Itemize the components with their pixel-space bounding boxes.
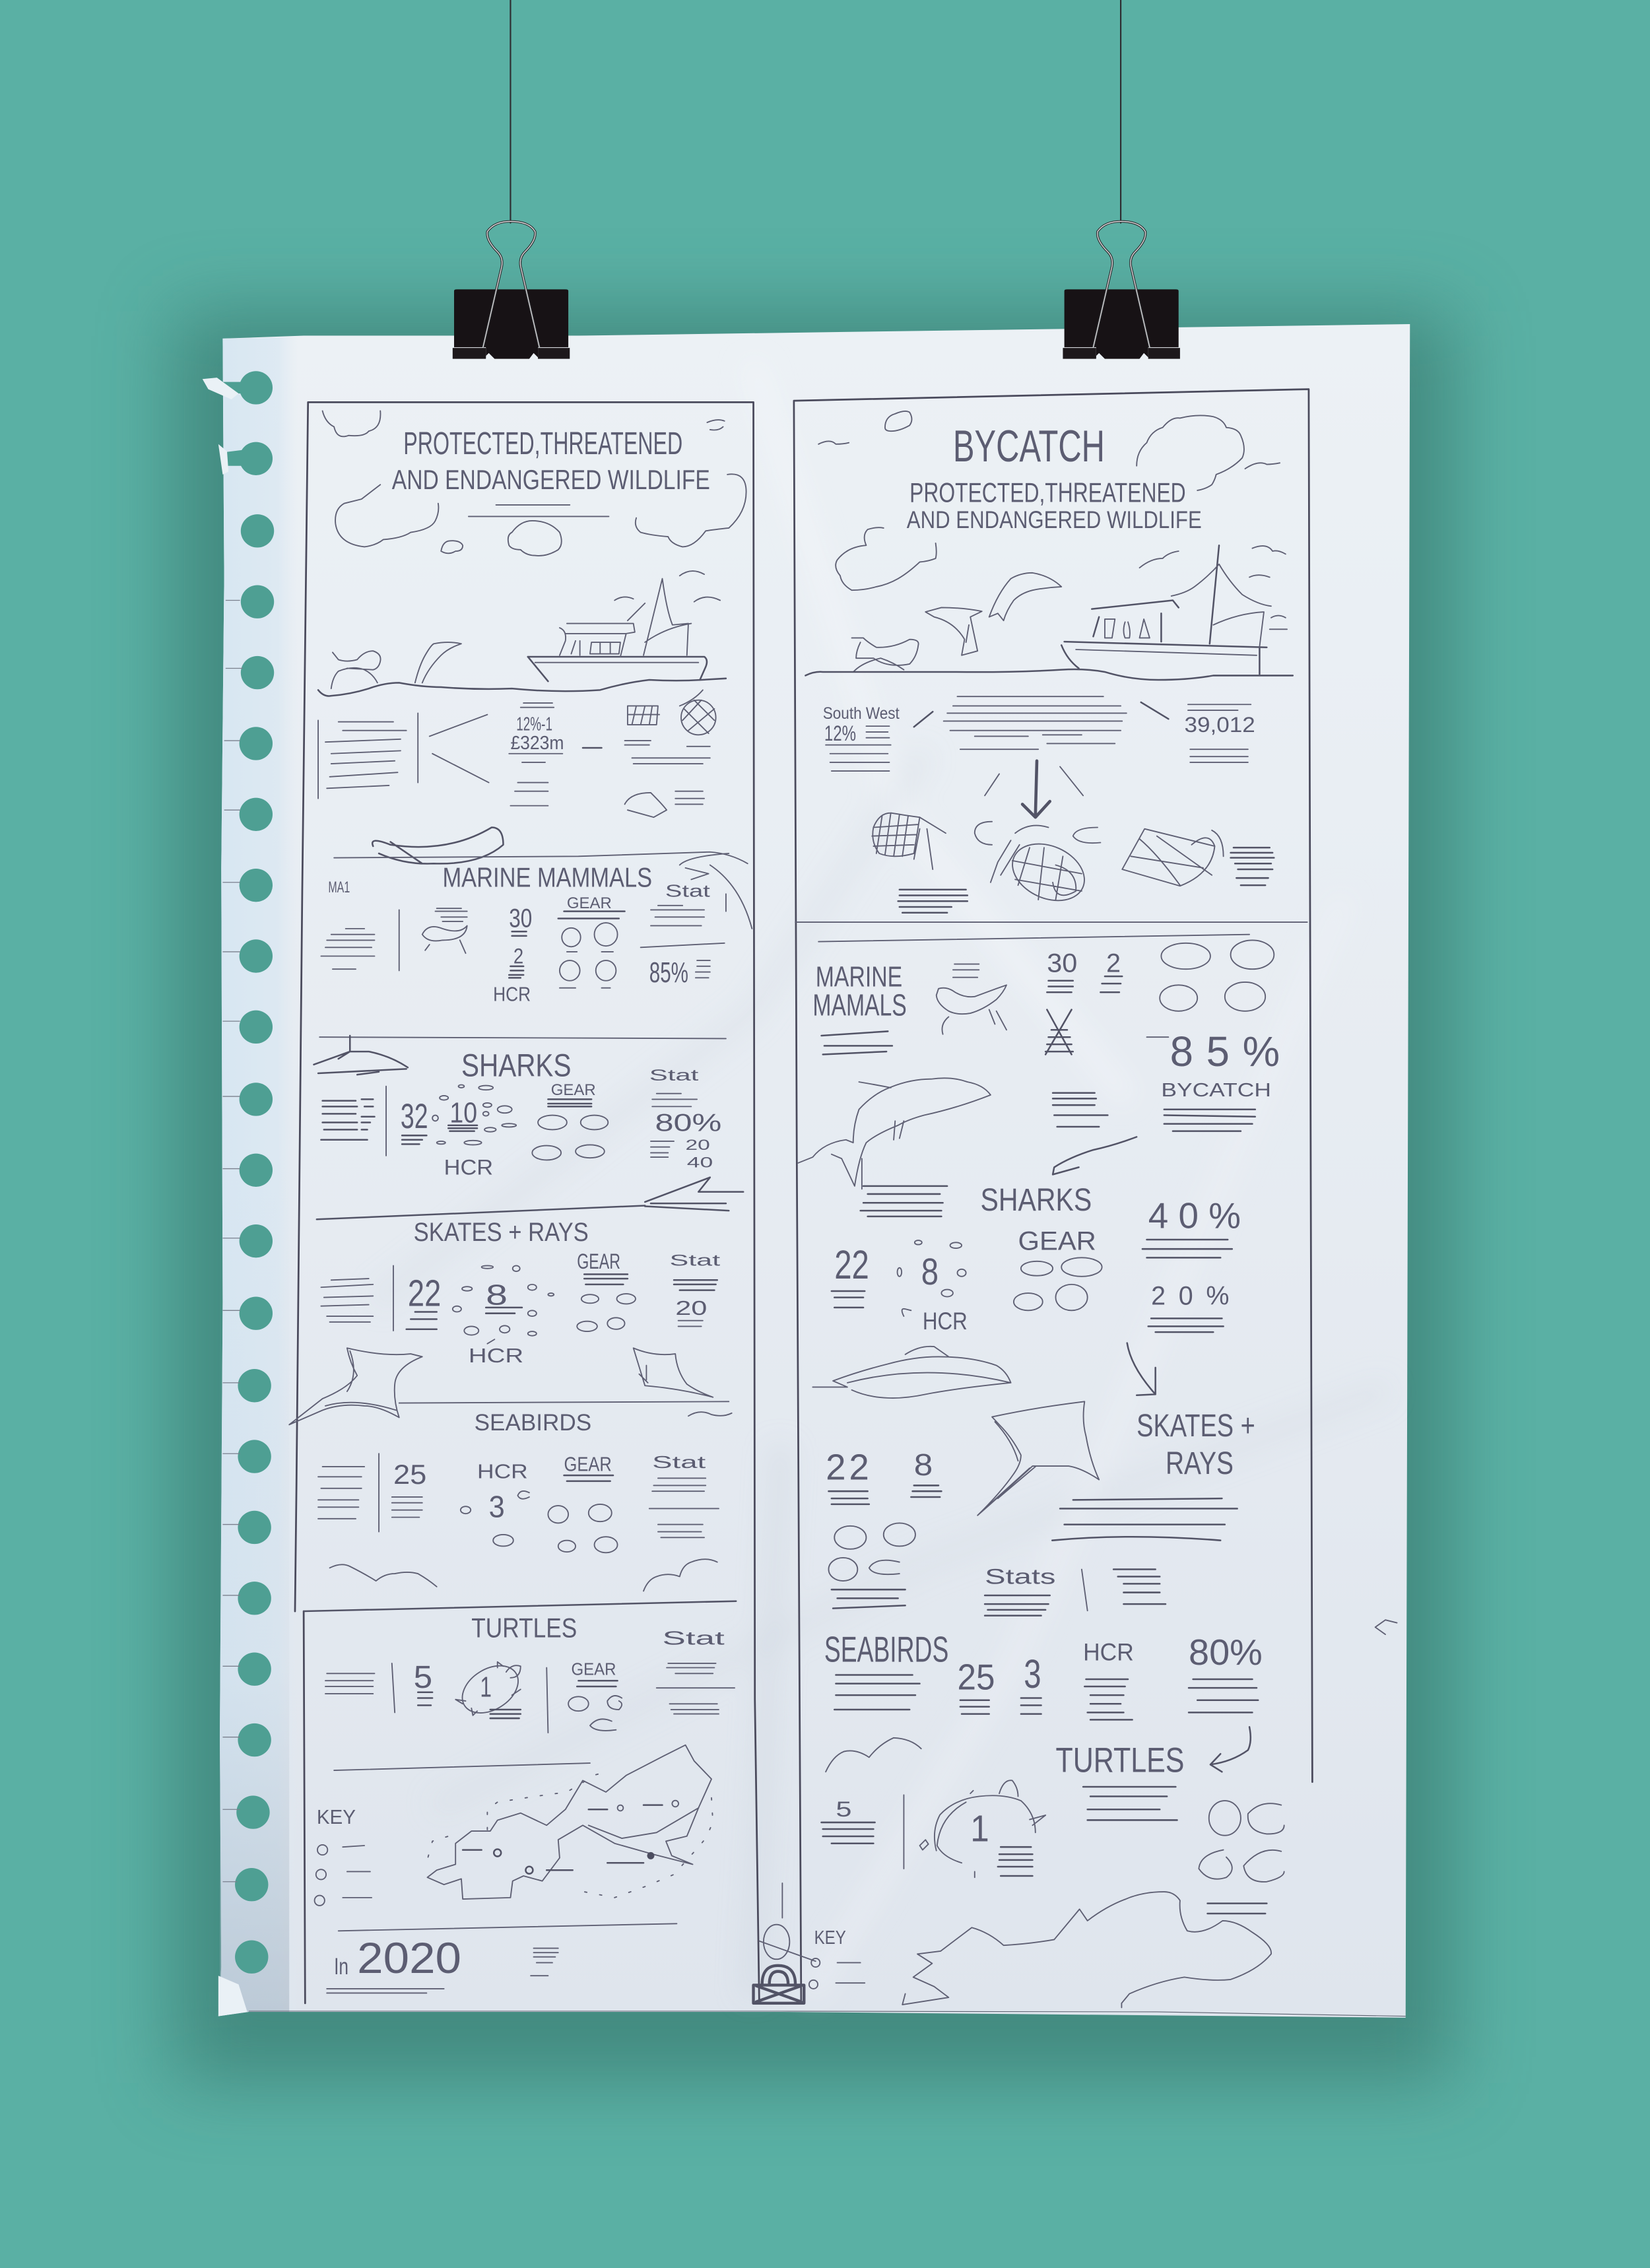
- right intro text: [823, 696, 1255, 771]
- section: left seabirds: Stat: [652, 1452, 706, 1472]
- section: right marine mammals: MARINE: [816, 961, 902, 993]
- section: left turtles: 1: [480, 1671, 492, 1703]
- section: left skates and rays: 22: [408, 1273, 441, 1315]
- arrow to skates: [1127, 1343, 1156, 1395]
- section: left marine mammals: HCR: [493, 983, 531, 1005]
- section: left marine mammals: Stat: [665, 881, 711, 901]
- section: left seabirds: SEABIRDS: [475, 1410, 591, 1436]
- tear marks: [222, 600, 243, 1882]
- section: left marine mammals: MARINE MAMMALS: [442, 861, 652, 892]
- section: right skates and rays: [826, 1401, 1255, 1616]
- left gear icons: [625, 690, 716, 817]
- right map and key: [809, 1892, 1271, 2007]
- left title: AND ENDANGERED WILDLIFE: [392, 464, 710, 495]
- hanging wires: [510, 0, 1121, 223]
- right clouds: [836, 411, 1244, 590]
- right title: AND ENDANGERED WILDLIFE: [907, 506, 1202, 533]
- section: left turtles: GEAR: [571, 1659, 616, 1679]
- section: left skates and rays: 20: [675, 1297, 707, 1319]
- section: right sharks: [812, 1182, 1241, 1398]
- left map and key: [315, 1745, 713, 1906]
- section: left seabirds: HCR: [477, 1460, 528, 1483]
- section: left skates and rays: HCR: [469, 1345, 523, 1367]
- section: right skates and rays: 22: [826, 1447, 869, 1488]
- coastline: [427, 1745, 711, 1899]
- section: right sharks: GEAR: [1018, 1226, 1096, 1255]
- section: right turtles: TURTLES: [1055, 1741, 1184, 1780]
- section: left sharks: 32: [401, 1097, 428, 1136]
- binder clip left: [453, 221, 570, 359]
- left footer in 2020: [327, 1923, 676, 1993]
- panel: right sketch: [754, 389, 1312, 2007]
- right title: [907, 422, 1202, 533]
- right gear icons: [872, 813, 1274, 913]
- right birds: [818, 441, 1287, 629]
- paper bottom edge: [249, 2011, 1406, 2017]
- right arrow down: [985, 761, 1083, 817]
- left map and key: KEY: [317, 1806, 356, 1828]
- left whale sketch: [372, 827, 503, 864]
- binding holes: [235, 371, 274, 1974]
- section: left turtles: [304, 1601, 736, 1733]
- section: left seabirds: GEAR: [564, 1453, 612, 1476]
- right water: [805, 669, 1293, 680]
- section: left turtles: 5: [414, 1659, 432, 1695]
- left boat: [528, 657, 707, 681]
- arrow to sharks: [1053, 1137, 1137, 1174]
- section: right seabirds: [824, 1629, 1263, 1772]
- right whale and dolphins: [852, 638, 919, 672]
- section: left sharks: 10: [449, 1096, 477, 1129]
- section: left marine mammals: 2: [513, 943, 523, 968]
- right intro text: 12%: [824, 721, 856, 745]
- section: left marine mammals: 30: [509, 904, 532, 933]
- right intro text: 39,012: [1184, 712, 1255, 737]
- section: right marine mammals: 2: [1106, 949, 1121, 978]
- section: right sharks: 22: [834, 1242, 869, 1287]
- section: left seabirds: 3: [489, 1490, 505, 1524]
- section: left skates and rays: SKATES + RAYS: [414, 1218, 589, 1247]
- section: left sharks: 40: [687, 1154, 713, 1170]
- left intro text: £323m: [510, 733, 564, 754]
- binder clip right: [1063, 221, 1180, 359]
- section: left seabirds: 25: [393, 1459, 426, 1490]
- section: right seabirds: SEABIRDS: [824, 1629, 948, 1670]
- section: right marine mammals: MAMALS: [812, 987, 907, 1022]
- left footer in 2020: In: [334, 1954, 348, 1980]
- section: right marine mammals: 30: [1047, 949, 1077, 978]
- section: left turtles: Stat: [663, 1628, 725, 1649]
- left panel frame: [295, 402, 759, 2003]
- section: right marine mammals: [795, 922, 1307, 1189]
- left water: [318, 679, 726, 696]
- section: left sharks: HCR: [444, 1154, 493, 1179]
- torn paper shreds: [203, 378, 248, 2017]
- torn gaps beside holes: [217, 382, 243, 466]
- right panel frame: [794, 389, 1312, 2000]
- section: left skates and rays: 8: [486, 1279, 508, 1312]
- right boat: [1061, 545, 1267, 674]
- section: right sharks: HCR: [923, 1307, 968, 1335]
- section: right marine mammals: 85%: [1170, 1028, 1280, 1075]
- stray mark on paper edge: [1375, 1620, 1397, 1634]
- section: right seabirds: 80%: [1189, 1632, 1263, 1673]
- section: right sharks: 40%: [1148, 1195, 1241, 1236]
- right map and key: KEY: [814, 1927, 846, 1949]
- section: left sharks: 20: [686, 1137, 710, 1153]
- section: left skates and rays: [289, 1205, 721, 1424]
- left intro text: 12%-1: [516, 714, 552, 735]
- section: left sharks: 80%: [655, 1109, 721, 1137]
- section: left marine mammals: [321, 852, 752, 1005]
- section: left sharks: GEAR: [551, 1081, 596, 1099]
- section: left marine mammals: MA1: [328, 879, 350, 896]
- section: right sharks: 20%: [1151, 1282, 1229, 1311]
- section: left sharks: SHARKS: [461, 1048, 571, 1083]
- section: right sharks: SHARKS: [981, 1182, 1092, 1218]
- right title: BYCATCH: [953, 422, 1105, 471]
- panel: left sketch: [289, 402, 759, 2003]
- left clouds: [323, 411, 746, 556]
- paper sheet: [218, 324, 1410, 2018]
- section: right turtles: [822, 1727, 1284, 1914]
- section: right skates and rays: Stats: [985, 1564, 1055, 1588]
- section: right seabirds: HCR: [1083, 1638, 1134, 1666]
- section: right skates and rays: RAYS: [1166, 1446, 1234, 1481]
- paper shadow: [174, 311, 1453, 2083]
- left footer in 2020: 2020: [357, 1933, 461, 1982]
- section: left sharks: Stat: [649, 1067, 699, 1084]
- section: left sharks: [314, 1036, 743, 1211]
- section: right sharks: 8: [921, 1251, 939, 1293]
- section: right turtles: 1: [970, 1807, 989, 1850]
- right title: PROTECTED,THREATENED: [909, 477, 1186, 508]
- left title: [392, 426, 710, 516]
- section: right seabirds: 3: [1024, 1651, 1041, 1696]
- section: left skates and rays: GEAR: [577, 1249, 620, 1273]
- left intro text: [318, 703, 601, 806]
- section: left skates and rays: Stat: [669, 1251, 721, 1269]
- section: left turtles: TURTLES: [471, 1612, 577, 1643]
- section: left marine mammals: GEAR: [567, 894, 612, 912]
- left whale and dolphin: [331, 642, 461, 688]
- paper margin strip: [218, 337, 298, 2017]
- center strip marker: [754, 1883, 816, 2003]
- paper margin shading: [220, 1157, 289, 2012]
- section: left seabirds: [318, 1401, 732, 1591]
- section: right turtles: 5: [836, 1797, 852, 1821]
- left title: PROTECTED,THREATENED: [403, 426, 682, 461]
- paper creases: [376, 362, 1388, 1996]
- section: right skates and rays: SKATES +: [1137, 1408, 1255, 1444]
- section: right marine mammals: BYCATCH: [1161, 1080, 1271, 1101]
- section: right seabirds: 25: [957, 1656, 995, 1697]
- right intro text: South West: [823, 704, 900, 723]
- section: left marine mammals: 85%: [649, 956, 688, 989]
- left birds: [614, 571, 720, 602]
- section: right skates and rays: 8: [914, 1448, 933, 1482]
